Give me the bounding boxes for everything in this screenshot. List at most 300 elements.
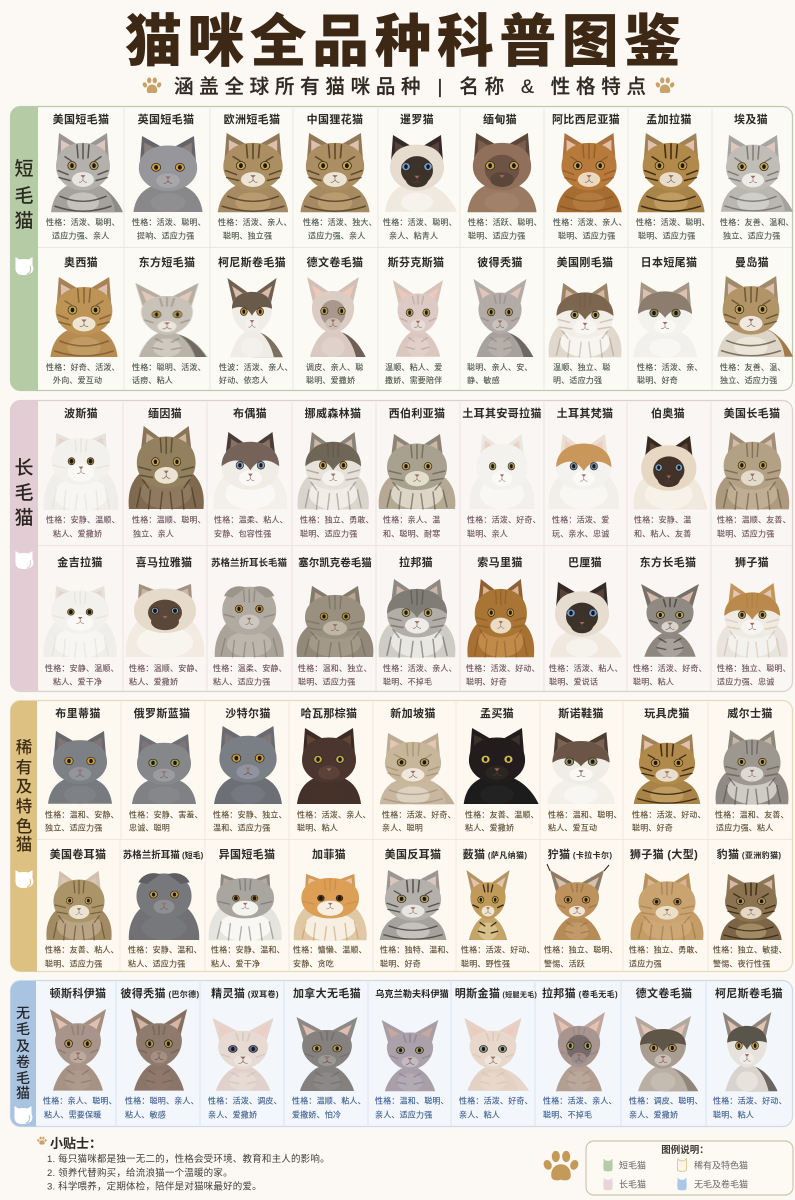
name: 沙特尔猫 bbox=[225, 706, 271, 720]
traits: 温顺、粘人、爱 bbox=[385, 362, 442, 372]
name: 美国反耳猫 bbox=[385, 847, 441, 861]
sidebar label bbox=[14, 158, 34, 232]
traits: 性格：独立、聪明、 bbox=[544, 944, 618, 954]
traits: 聪明、好奇 bbox=[380, 958, 421, 968]
cat portrait bbox=[294, 874, 367, 941]
name: 拉邦猫 (卷毛无毛) bbox=[542, 986, 618, 1000]
traits: 亲人、适应力强 bbox=[375, 1110, 432, 1120]
card: 孟加拉猫 bbox=[636, 112, 713, 240]
traits: 性格：温顺、聪明、 bbox=[132, 514, 206, 524]
traits bbox=[553, 217, 627, 240]
card: 阿比西尼亚猫 bbox=[552, 112, 630, 240]
cat portrait bbox=[548, 434, 622, 509]
cat portrait bbox=[212, 1018, 281, 1091]
card: 曼岛猫 bbox=[717, 255, 793, 385]
traits: 聪明、爱说话 bbox=[549, 676, 598, 686]
traits: 性格：温顺、粘人、 bbox=[292, 1096, 366, 1106]
traits: 性格：调皮、聪明、 bbox=[629, 1096, 703, 1106]
traits: 性格：温柔、粘人、 bbox=[214, 514, 288, 524]
card: 德文卷毛猫 bbox=[629, 986, 703, 1120]
card: 薮猫（萨凡纳猫） bbox=[461, 847, 535, 968]
name: 拉邦猫 bbox=[399, 555, 433, 569]
sidebar label: 短 bbox=[14, 158, 34, 180]
cat portrait bbox=[393, 280, 450, 357]
traits: 性格：活泼、粘人、 bbox=[549, 663, 623, 673]
traits: 聪明、适应力强 bbox=[468, 230, 525, 240]
name: 美国刚毛猫 bbox=[557, 255, 613, 269]
name: 缅因猫 bbox=[148, 406, 182, 420]
name: 玩具虎猫 bbox=[644, 706, 690, 720]
traits: 性格：活泼、亲人、 bbox=[383, 663, 457, 673]
cat portrait bbox=[218, 133, 297, 212]
cat portrait bbox=[129, 426, 207, 509]
traits bbox=[375, 1096, 449, 1120]
traits: 聪明、不掉毛 bbox=[543, 1110, 592, 1120]
traits: 性格：活泼、亲人、 bbox=[297, 810, 371, 820]
icon: left paw bbox=[142, 77, 162, 93]
name: 孟加拉猫 bbox=[646, 112, 692, 126]
cat portrait bbox=[380, 733, 455, 804]
card: 柯尼斯卷毛猫 bbox=[218, 255, 293, 385]
traits: 性格：温和、聪明、 bbox=[375, 1096, 449, 1106]
traits bbox=[629, 944, 703, 968]
traits: 聪明、适应力强 bbox=[45, 958, 102, 968]
card: 布偶猫 bbox=[214, 406, 291, 538]
traits: 亲人、爱撒娇 bbox=[208, 1110, 257, 1120]
traits: 聪明、适应力强 bbox=[717, 528, 774, 538]
tips heading: 小贴士： bbox=[50, 1136, 102, 1151]
traits: 性格：安静、温 bbox=[634, 514, 691, 524]
traits: 性格：温柔、安静、 bbox=[213, 663, 287, 673]
traits: 警惕、夜行性强 bbox=[713, 958, 770, 968]
traits: 适应力强、亲人 bbox=[52, 230, 109, 240]
traits: 性格：安静、温和、 bbox=[211, 944, 285, 954]
card: 美国卷耳猫 bbox=[45, 847, 119, 968]
traits: 性格：亲人、聪明、 bbox=[43, 1096, 117, 1106]
cat portrait bbox=[126, 584, 204, 658]
card: 斯诺鞋猫 bbox=[547, 706, 623, 832]
cat portrait bbox=[135, 283, 207, 357]
cat portrait bbox=[298, 432, 372, 509]
sidebar label bbox=[16, 738, 32, 854]
icon: sidebar cat bbox=[14, 1106, 32, 1124]
card: 苏格兰折耳长毛猫 bbox=[211, 557, 287, 686]
cat portrait bbox=[723, 1012, 778, 1091]
name: 奥西猫 bbox=[64, 255, 98, 269]
traits: 性格：活跃、聪明、 bbox=[468, 217, 542, 227]
cat portrait bbox=[637, 133, 713, 212]
cat portrait bbox=[717, 583, 791, 657]
traits bbox=[467, 514, 541, 538]
card: 拉邦猫（卷毛无毛） bbox=[542, 986, 618, 1120]
traits: 聪明、适应力强 bbox=[300, 528, 357, 538]
traits bbox=[45, 944, 119, 968]
card: 美国反耳猫 bbox=[380, 847, 455, 968]
card: 俄罗斯蓝猫 bbox=[129, 706, 204, 832]
traits: 性格：聪明、活泼、 bbox=[132, 362, 206, 372]
traits: 聪明、粘人 bbox=[297, 822, 338, 832]
name: 异国短毛猫 bbox=[219, 847, 275, 861]
traits bbox=[633, 663, 707, 686]
traits: 独立、适应力强 bbox=[720, 375, 777, 385]
traits: 性格：安静、害羞、 bbox=[129, 810, 203, 820]
sidebar label: 卷 bbox=[16, 1054, 30, 1070]
traits: 安静、贪吃 bbox=[293, 958, 334, 968]
card: 缅甸猫 bbox=[467, 112, 545, 240]
traits: 独立、亲人 bbox=[133, 528, 174, 538]
traits bbox=[632, 810, 706, 832]
traits: 性格：温和、友善、 bbox=[715, 810, 789, 820]
card: 精灵猫（双耳卷） bbox=[208, 986, 282, 1120]
traits bbox=[382, 810, 456, 832]
card: 英国短毛猫 bbox=[132, 112, 211, 240]
traits: 性格：安静、独立、 bbox=[213, 810, 287, 820]
traits bbox=[713, 944, 787, 968]
card: 乌克兰勒夫科伊猫 bbox=[375, 988, 449, 1120]
cat portrait bbox=[214, 726, 290, 804]
tips list: 3. 科学喂养，定期体检，陪伴是对猫咪最好的爱。 bbox=[47, 1180, 262, 1192]
traits: 性格：活泼、好奇、 bbox=[459, 1096, 533, 1106]
cat portrait bbox=[549, 283, 625, 357]
card: 布里蒂猫 bbox=[45, 706, 120, 832]
traits: 外向、爱互动 bbox=[53, 375, 102, 385]
card: 西伯利亚猫 bbox=[379, 406, 459, 538]
sidebar label: 及 bbox=[16, 778, 32, 796]
card: 美国短毛猫 bbox=[46, 112, 123, 240]
sidebar label: 毛 bbox=[16, 1070, 30, 1086]
name: 土耳其梵猫 bbox=[557, 406, 613, 420]
traits bbox=[717, 663, 791, 686]
traits: 粘人、需要保暖 bbox=[44, 1110, 101, 1120]
traits: 性格：温和、安静、 bbox=[45, 810, 119, 820]
traits: 亲人、爱撒娇 bbox=[629, 1110, 678, 1120]
traits bbox=[213, 810, 287, 832]
traits: 聪明、适应力强 bbox=[638, 230, 695, 240]
card: 狞猫（卡拉卡尔） bbox=[544, 847, 618, 968]
traits: 性格：温和、聪明、 bbox=[548, 810, 622, 820]
traits: 静、敏感 bbox=[467, 375, 500, 385]
traits: 亲人、聪明 bbox=[382, 822, 423, 832]
traits bbox=[46, 514, 120, 538]
sidebar label: 猫 bbox=[16, 1085, 30, 1101]
name: 波斯猫 bbox=[64, 406, 98, 420]
traits: 温顺、独立、聪 bbox=[553, 362, 610, 372]
traits: 性格：聪明、亲人、 bbox=[125, 1096, 199, 1106]
name: 喜马拉雅猫 bbox=[136, 555, 192, 569]
traits: 玩、亲水、忠诚 bbox=[552, 528, 609, 538]
traits bbox=[45, 663, 119, 686]
card: 加菲猫 bbox=[293, 847, 367, 968]
traits: 和、聪明、耐寒 bbox=[383, 528, 440, 538]
traits: 性波：活泼、亲人、 bbox=[219, 362, 293, 372]
traits bbox=[629, 1096, 703, 1120]
name: 东方长毛猫 bbox=[640, 555, 696, 569]
traits: 聪明、不掉毛 bbox=[383, 676, 432, 686]
cat portrait bbox=[717, 276, 793, 357]
traits: 性格：活泼、亲人、 bbox=[543, 1096, 617, 1106]
cat portrait bbox=[553, 1012, 612, 1091]
traits: 聪明、好奇 bbox=[637, 375, 678, 385]
traits bbox=[292, 1096, 366, 1120]
name: 东方短毛猫 bbox=[139, 255, 195, 269]
name: 彼得秃猫 bbox=[477, 255, 523, 269]
cat portrait bbox=[721, 135, 793, 212]
traits: 调皮、亲人、聪 bbox=[306, 362, 363, 372]
icon: sidebar cat bbox=[16, 551, 33, 569]
traits: 粘人、爱撒娇 bbox=[53, 528, 102, 538]
legend item: 长毛猫 bbox=[603, 1178, 646, 1190]
card: 索马里猫 bbox=[466, 555, 540, 686]
traits: 亲人、粘青人 bbox=[389, 230, 438, 240]
traits bbox=[214, 514, 288, 538]
card: 巴厘猫 bbox=[549, 555, 623, 686]
name: 德文卷毛猫 bbox=[636, 986, 692, 1000]
card: 暹罗猫 bbox=[383, 112, 457, 240]
name: 中国狸花猫 bbox=[307, 112, 363, 126]
name: 埃及猫 bbox=[734, 112, 768, 126]
traits bbox=[459, 1096, 533, 1120]
name: 狞猫 (卡拉卡尔) bbox=[548, 847, 612, 861]
legend item: 无毛及卷毛猫: 无毛及卷毛猫 bbox=[694, 1178, 748, 1190]
cat portrait bbox=[48, 731, 120, 804]
traits bbox=[132, 362, 206, 385]
traits: 性格：安静、温顺、 bbox=[46, 514, 120, 524]
cat portrait bbox=[641, 584, 706, 657]
sidebar label: 稀 bbox=[16, 738, 32, 757]
cat portrait bbox=[214, 432, 291, 509]
sidebar label: 特 bbox=[16, 797, 32, 816]
traits: 适应力强、亲人 bbox=[308, 230, 365, 240]
icon: right paw bbox=[655, 77, 675, 93]
traits bbox=[129, 663, 203, 686]
panel: 无毛及卷毛猫 bbox=[10, 980, 793, 1126]
traits bbox=[466, 663, 540, 686]
card: 苏格兰折耳猫（短毛） bbox=[123, 849, 204, 968]
card: 埃及猫 bbox=[720, 112, 794, 240]
tips list: 2. 领养代替购买，给流浪猫一个温暖的家。 bbox=[47, 1167, 233, 1179]
cat portrait bbox=[132, 734, 204, 804]
name: 加菲猫 bbox=[312, 847, 346, 861]
card: 狮子猫 bbox=[717, 555, 791, 686]
traits bbox=[544, 944, 618, 968]
name: 欧洲短毛猫 bbox=[224, 112, 280, 126]
sidebar label: 毛 bbox=[16, 1021, 30, 1037]
traits bbox=[43, 1096, 117, 1120]
card: 挪威森林猫 bbox=[298, 406, 374, 538]
icon: tips paw bbox=[37, 1137, 47, 1145]
cat portrait bbox=[297, 728, 369, 804]
card: 土耳其安哥拉猫 bbox=[462, 406, 542, 538]
legend title: 图例说明： bbox=[661, 1144, 709, 1156]
name: 德文卷毛猫 bbox=[307, 255, 363, 269]
traits: 性格：亲人、温 bbox=[383, 514, 440, 524]
traits: 性格：活泼、聪明、 bbox=[46, 217, 120, 227]
name: 暹罗猫 bbox=[400, 112, 434, 126]
cat portrait bbox=[469, 434, 538, 509]
card: 玩具虎猫 bbox=[632, 706, 709, 832]
traits bbox=[380, 944, 454, 968]
name: 斯芬克斯猫 bbox=[388, 255, 444, 269]
name: 英国短毛猫 bbox=[138, 112, 194, 126]
traits: 聪明、好奇 bbox=[466, 676, 507, 686]
traits: 聪明、适应力强 bbox=[558, 230, 615, 240]
name: 俄罗斯蓝猫 bbox=[134, 706, 190, 720]
traits: 性格：活泼、独大、 bbox=[303, 217, 377, 227]
name: 威尔士猫 bbox=[727, 706, 773, 720]
name: 明斯金猫 (短腿无毛) bbox=[455, 986, 537, 1000]
traits bbox=[717, 514, 791, 538]
traits: 性格：独特、温和、 bbox=[380, 944, 454, 954]
cat portrait bbox=[44, 586, 117, 658]
cat portrait bbox=[296, 1017, 365, 1091]
traits: 性格：活泼、亲人、 bbox=[218, 217, 292, 227]
panel: 短毛猫 bbox=[10, 106, 794, 390]
card: 缅因猫 bbox=[129, 406, 207, 538]
traits bbox=[213, 663, 287, 686]
traits: 明、适应力强 bbox=[553, 375, 602, 385]
title: 猫咪全品种科普图鉴 bbox=[125, 10, 681, 74]
traits: 粘人、适应力强 bbox=[128, 958, 185, 968]
name: 美国短毛猫 bbox=[53, 112, 109, 126]
cat portrait bbox=[51, 133, 123, 212]
card: 塞尔凯克卷毛猫 bbox=[297, 556, 377, 686]
traits: 性格：活泼、聪明、 bbox=[132, 217, 206, 227]
card: 哈瓦那棕猫 bbox=[297, 706, 371, 832]
traits bbox=[303, 217, 377, 240]
cat portrait bbox=[297, 586, 377, 657]
card: 明斯金猫（短腿无毛） bbox=[455, 986, 537, 1120]
name: 索马里猫 bbox=[477, 555, 523, 569]
traits: 性格：温顺、友善、 bbox=[717, 514, 791, 524]
legend bbox=[586, 1141, 793, 1195]
traits: 粘人、爱撒娇 bbox=[129, 676, 178, 686]
sidebar label: 无 bbox=[16, 1005, 30, 1021]
traits: 聪明、适应力强 bbox=[298, 676, 355, 686]
traits bbox=[553, 362, 610, 385]
cat portrait bbox=[385, 135, 457, 212]
traits bbox=[125, 1096, 199, 1120]
traits: 粘人、爱干净 bbox=[53, 676, 102, 686]
name: 美国卷耳猫 bbox=[50, 847, 106, 861]
subtitle text: 涵盖全球所有猫咪品种 | 名称 & 性格特点 bbox=[174, 76, 646, 98]
traits: 性格：好奇、活泼、 bbox=[46, 362, 120, 372]
traits: 聪明、亲人、安、 bbox=[467, 362, 533, 372]
traits bbox=[383, 514, 440, 538]
card: 伯曼猫 bbox=[633, 406, 707, 538]
name: 阿比西尼亚猫 bbox=[552, 112, 620, 126]
traits bbox=[467, 362, 533, 385]
cat portrait bbox=[50, 1009, 113, 1091]
name: 伯奥猫 bbox=[651, 406, 685, 420]
cat portrait bbox=[633, 436, 707, 509]
cat portrait bbox=[129, 873, 199, 940]
card: 喜马拉雅猫 bbox=[126, 555, 204, 686]
traits: 性格：活泼、调皮、 bbox=[208, 1096, 282, 1106]
traits: 性格：友善、温顺、 bbox=[465, 810, 539, 820]
traits: 聪明、粘人 bbox=[633, 676, 674, 686]
traits: 性格：安静、温和、 bbox=[128, 944, 202, 954]
traits bbox=[720, 217, 794, 240]
card: 狮子猫（大型） bbox=[629, 847, 707, 968]
cat portrait bbox=[633, 282, 705, 357]
cat portrait bbox=[716, 730, 792, 804]
cat portrait bbox=[634, 734, 709, 804]
traits: 性格：慵懒、温顺、 bbox=[293, 944, 367, 954]
legend item: 稀有及特色猫: 稀有及特色猫 bbox=[694, 1160, 748, 1170]
traits: 聪明、爱撒娇 bbox=[306, 375, 355, 385]
traits: 警惕、活跃 bbox=[544, 958, 585, 968]
traits bbox=[132, 217, 206, 240]
traits: 性格：活泼、亲人、 bbox=[553, 217, 627, 227]
traits bbox=[552, 514, 609, 538]
cat portrait bbox=[379, 579, 459, 657]
card: 德文卷毛猫 bbox=[306, 255, 366, 385]
name: 苏格兰折耳猫 (短毛) bbox=[123, 849, 204, 861]
icon: large paw bbox=[542, 1151, 580, 1180]
card: 日本短尾猫 bbox=[633, 255, 705, 385]
sidebar label: 及 bbox=[16, 1038, 30, 1054]
traits: 适应力强、忠诚 bbox=[717, 676, 774, 686]
traits: 适应力强 bbox=[629, 958, 662, 968]
cat portrait bbox=[133, 136, 211, 212]
traits bbox=[219, 362, 293, 385]
card: 波斯猫 bbox=[44, 406, 120, 538]
name: 新加坡猫 bbox=[390, 706, 436, 720]
cat portrait bbox=[379, 434, 459, 509]
card: 欧洲短毛猫 bbox=[218, 112, 297, 240]
sidebar label bbox=[14, 457, 34, 529]
card: 新加坡猫 bbox=[380, 706, 456, 832]
cat portrait bbox=[227, 278, 283, 357]
cat portrait bbox=[380, 870, 455, 940]
name: 哈瓦那棕猫 bbox=[301, 706, 357, 720]
traits bbox=[293, 944, 367, 968]
card: 奥西猫 bbox=[46, 255, 126, 385]
cat portrait bbox=[464, 1018, 529, 1091]
traits bbox=[636, 217, 710, 240]
traits bbox=[385, 362, 442, 385]
name: 金吉拉猫 bbox=[57, 555, 103, 569]
traits: 性格：独立、敏捷、 bbox=[713, 944, 787, 954]
traits bbox=[548, 810, 622, 832]
traits: 亲人、粘人 bbox=[459, 1110, 500, 1120]
cat portrait bbox=[716, 432, 793, 509]
name: 狮子猫 bbox=[735, 555, 769, 569]
cat portrait bbox=[307, 277, 366, 357]
traits bbox=[128, 944, 202, 968]
panel: 长毛猫 bbox=[10, 400, 793, 692]
tips list bbox=[47, 1153, 330, 1192]
traits: 性格：活泼、好奇、 bbox=[382, 810, 456, 820]
card: 沙特尔猫 bbox=[213, 706, 290, 832]
traits: 安静、包容性强 bbox=[214, 528, 271, 538]
sidebar label: 毛 bbox=[14, 482, 34, 504]
sidebar label: 长 bbox=[14, 457, 34, 479]
traits: 性格：友善、温、 bbox=[720, 362, 786, 372]
card: 柯尼斯卷毛猫 bbox=[713, 986, 787, 1120]
name: 塞尔凯克卷毛猫 bbox=[298, 556, 372, 569]
cat portrait bbox=[635, 1016, 698, 1091]
legend item: 长毛猫: 长毛猫 bbox=[619, 1178, 646, 1190]
panel: 稀有及特色猫 bbox=[10, 700, 793, 972]
traits: 聪明、粘人 bbox=[713, 1110, 754, 1120]
traits: 性格：活泼、聪明、 bbox=[383, 217, 457, 227]
cat portrait bbox=[467, 579, 537, 657]
sidebar label: 毛 bbox=[14, 185, 34, 207]
name: 狮子猫 (大型) bbox=[630, 847, 698, 861]
traits: 性格：活泼、好动、 bbox=[466, 663, 540, 673]
sidebar label: 有 bbox=[16, 758, 32, 777]
